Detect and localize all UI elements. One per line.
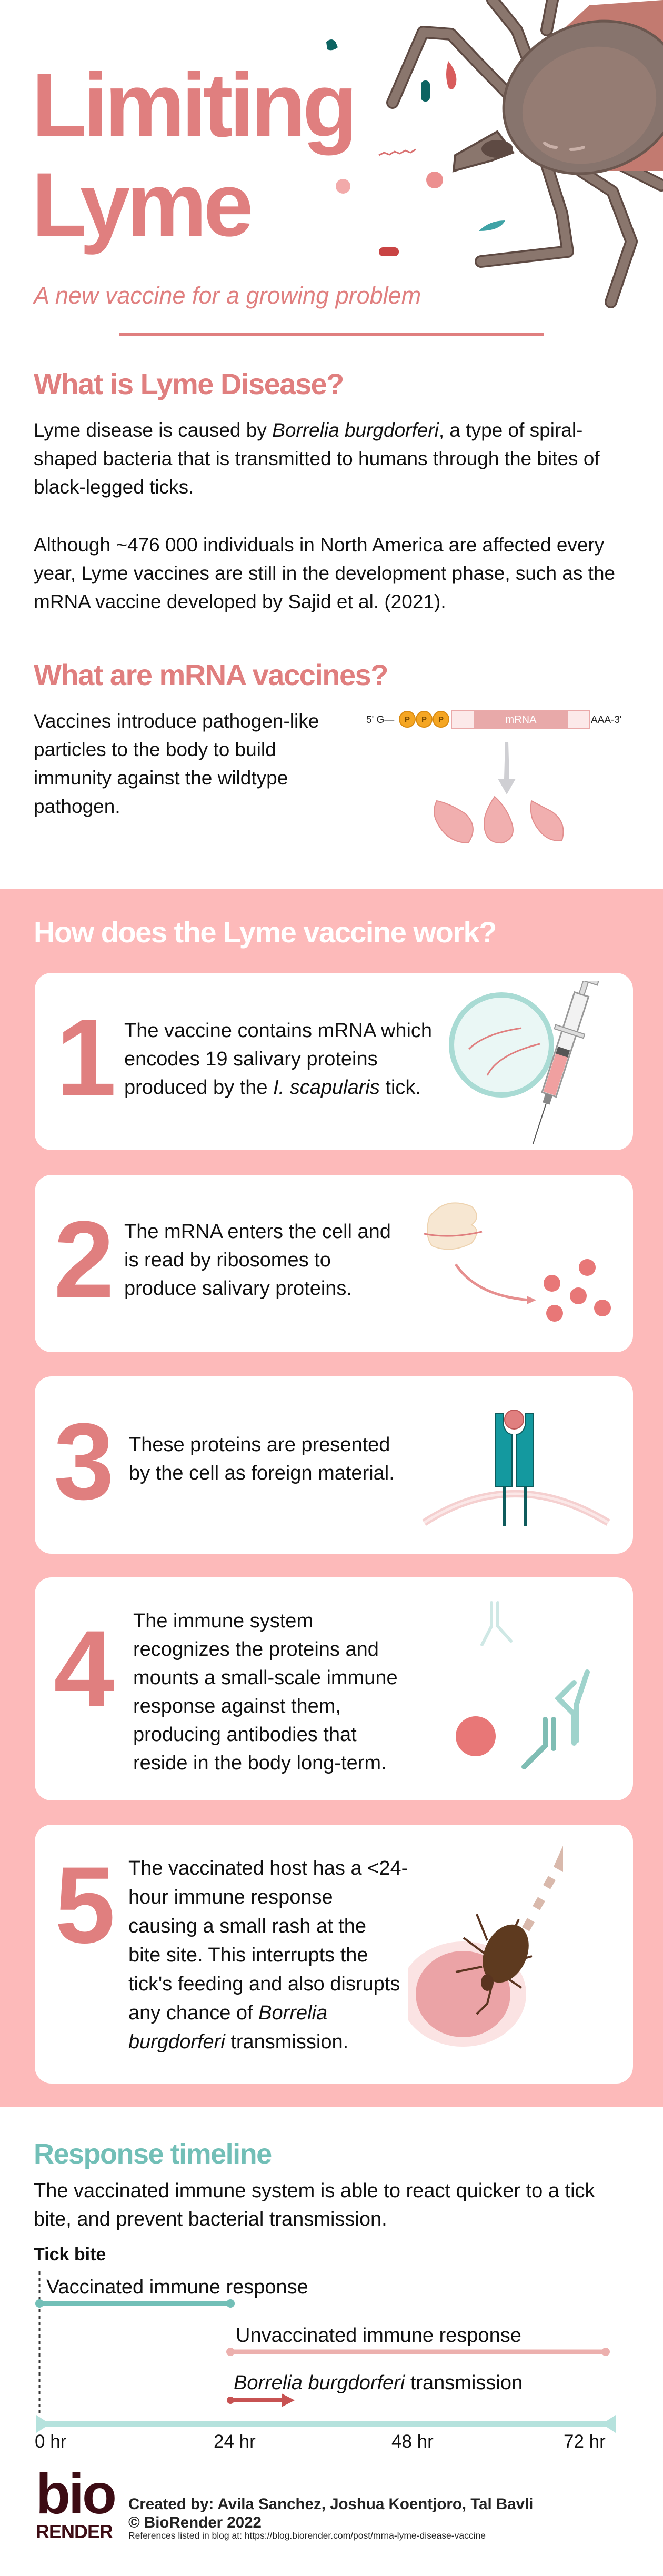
text: prevalence: mRNA vaccine developed by Sajid et al. (2021). bbox=[34, 591, 446, 612]
text step 2: is read by ribosomes to bbox=[124, 1249, 331, 1271]
credits: © BioRender 2022 bbox=[128, 2514, 262, 2531]
text: Lyme disease description: black-legged ticks. bbox=[34, 476, 194, 498]
text step 3: by the cell as foreign material. bbox=[129, 1462, 395, 1484]
subtitle: A new vaccine for a growing problem bbox=[34, 282, 421, 309]
label: Unvaccinated immune response: Unvaccinated immune response bbox=[236, 2325, 521, 2347]
text step 4: mounts a small-scale immune bbox=[133, 1667, 398, 1689]
text: Lyme disease description: shaped bacteria that is transmitted to humans through the bites of bbox=[34, 448, 600, 469]
number 2: 2 bbox=[54, 1199, 114, 1320]
number 1: 1 bbox=[56, 997, 116, 1118]
axis labels: 24 hr bbox=[214, 2431, 256, 2452]
text step 4: reside in the body long-term. bbox=[133, 1752, 387, 1774]
text step 5: burgdorferi transmission. bbox=[128, 2031, 348, 2053]
illustration: tick with bacteria bbox=[378, 0, 663, 308]
text step 5: tick's feeding and also disrupts bbox=[128, 1973, 400, 1995]
label: Vaccinated immune response: Vaccinated immune response bbox=[46, 2276, 308, 2298]
heading: how does the vaccine work: How does the Lyme vaccine work? bbox=[34, 915, 496, 949]
heading: Response timeline: Response timeline bbox=[34, 2138, 272, 2170]
text: prevalence: year, Lyme vaccines are still in the development phase, such as the bbox=[34, 562, 615, 584]
text step 5: any chance of Borrelia bbox=[128, 2002, 327, 2024]
icon: syringe with mRNA bbox=[449, 981, 599, 1144]
icon: receptor presenting protein bbox=[422, 1410, 610, 1526]
label: Borrelia transmission: Borrelia burgdorferi transmission bbox=[234, 2372, 523, 2394]
mRNA diagram: AAA-3' bbox=[591, 715, 622, 726]
text: prevalence bbox=[34, 534, 615, 612]
title bbox=[32, 55, 354, 255]
mRNA diagram: P bbox=[405, 715, 410, 724]
heading: What are mRNA vaccines: What are mRNA vaccines? bbox=[34, 658, 388, 691]
text step 5 bbox=[128, 1857, 408, 2053]
text step 4: recognizes the proteins and bbox=[133, 1638, 379, 1661]
text step 1: encodes 19 salivary proteins bbox=[124, 1048, 378, 1070]
logo: BioRender: bio bbox=[36, 2462, 115, 2525]
text: vaccines explanation bbox=[34, 710, 319, 817]
decorations left of tick bbox=[326, 39, 338, 51]
timeline chart bbox=[34, 2245, 616, 2452]
text step 2: The mRNA enters the cell and bbox=[124, 1221, 391, 1243]
number 4: 4 bbox=[54, 1608, 114, 1729]
text: Lyme disease description: Lyme disease is caused by Borrelia burgdorferi, a type of spiral- bbox=[34, 419, 582, 441]
text step 4: The immune system bbox=[133, 1610, 313, 1632]
text: prevalence: Although ~476 000 individuals in North America are affected every bbox=[34, 534, 604, 556]
text step 3: These proteins are presented bbox=[129, 1434, 390, 1456]
icon: ribosome producing proteins bbox=[424, 1202, 611, 1322]
credits bbox=[128, 2496, 533, 2531]
text step 4 bbox=[133, 1610, 398, 1774]
text step 2: produce salivary proteins. bbox=[124, 1277, 352, 1300]
references note: References listed in blog at: https://blog.biorender.com/post/mrna-lyme-disease-vaccine bbox=[128, 2530, 486, 2541]
text: Lyme disease description bbox=[34, 419, 600, 498]
axis labels bbox=[35, 2431, 606, 2452]
title: Limiting bbox=[32, 55, 354, 156]
mRNA diagram: P bbox=[438, 715, 444, 724]
text step 1: produced by the I. scapularis tick. bbox=[124, 1076, 421, 1099]
text: timeline description: bite, and prevent bacterial transmission. bbox=[34, 2208, 387, 2230]
card 1 bbox=[35, 973, 633, 1150]
label: Tick bite: Tick bite bbox=[34, 2245, 106, 2265]
text step 4: producing antibodies that bbox=[133, 1724, 357, 1746]
panel: how does the vaccine work bbox=[0, 889, 663, 2107]
text: vaccines explanation: Vaccines introduce pathogen-like bbox=[34, 710, 319, 732]
text step 4: response against them, bbox=[133, 1695, 341, 1717]
text: timeline description bbox=[34, 2180, 595, 2230]
number 3: 3 bbox=[54, 1401, 114, 1522]
mRNA diagram bbox=[366, 710, 622, 844]
text step 2 bbox=[124, 1221, 391, 1300]
credits: Created by: Avila Sanchez, Joshua Koentjoro, Tal Bavli bbox=[128, 2496, 533, 2513]
mRNA diagram: P bbox=[421, 715, 427, 724]
text step 3 bbox=[129, 1434, 395, 1484]
card 3 bbox=[35, 1376, 633, 1554]
logo: BioRender: RENDER bbox=[36, 2521, 113, 2542]
mRNA diagram: mRNA bbox=[506, 714, 537, 726]
icon: antibodies bbox=[456, 1601, 590, 1769]
text: vaccines explanation: pathogen. bbox=[34, 796, 120, 817]
card 2 bbox=[35, 1175, 633, 1352]
text step 1: The vaccine contains mRNA which bbox=[124, 1020, 432, 1042]
number 5: 5 bbox=[55, 1844, 115, 1966]
text: timeline description: The vaccinated immune system is able to react quicker to a tick bbox=[34, 2180, 595, 2202]
title: Lyme bbox=[32, 154, 250, 255]
card 4 bbox=[35, 1577, 633, 1800]
text step 5: bite site. This interrupts the bbox=[128, 1944, 368, 1966]
axis labels: 0 hr bbox=[35, 2431, 66, 2452]
heading: What is Lyme Disease: What is Lyme Disease? bbox=[34, 367, 344, 400]
text: vaccines explanation: particles to the body to build bbox=[34, 739, 276, 760]
axis labels: 72 hr bbox=[564, 2431, 606, 2452]
arrow down bbox=[498, 742, 516, 794]
text: vaccines explanation: immunity against the wildtype bbox=[34, 767, 288, 789]
text step 5: hour immune response bbox=[128, 1886, 333, 1908]
icon: tick on rash with arrow bbox=[408, 1846, 563, 2047]
text step 1 bbox=[124, 1020, 432, 1099]
text step 5: causing a small rash at the bbox=[128, 1915, 366, 1937]
axis labels: 48 hr bbox=[391, 2431, 434, 2452]
mRNA diagram: 5' G— bbox=[366, 715, 394, 726]
card 5 bbox=[35, 1825, 633, 2084]
text step 5: The vaccinated host has a <24- bbox=[128, 1857, 408, 1879]
